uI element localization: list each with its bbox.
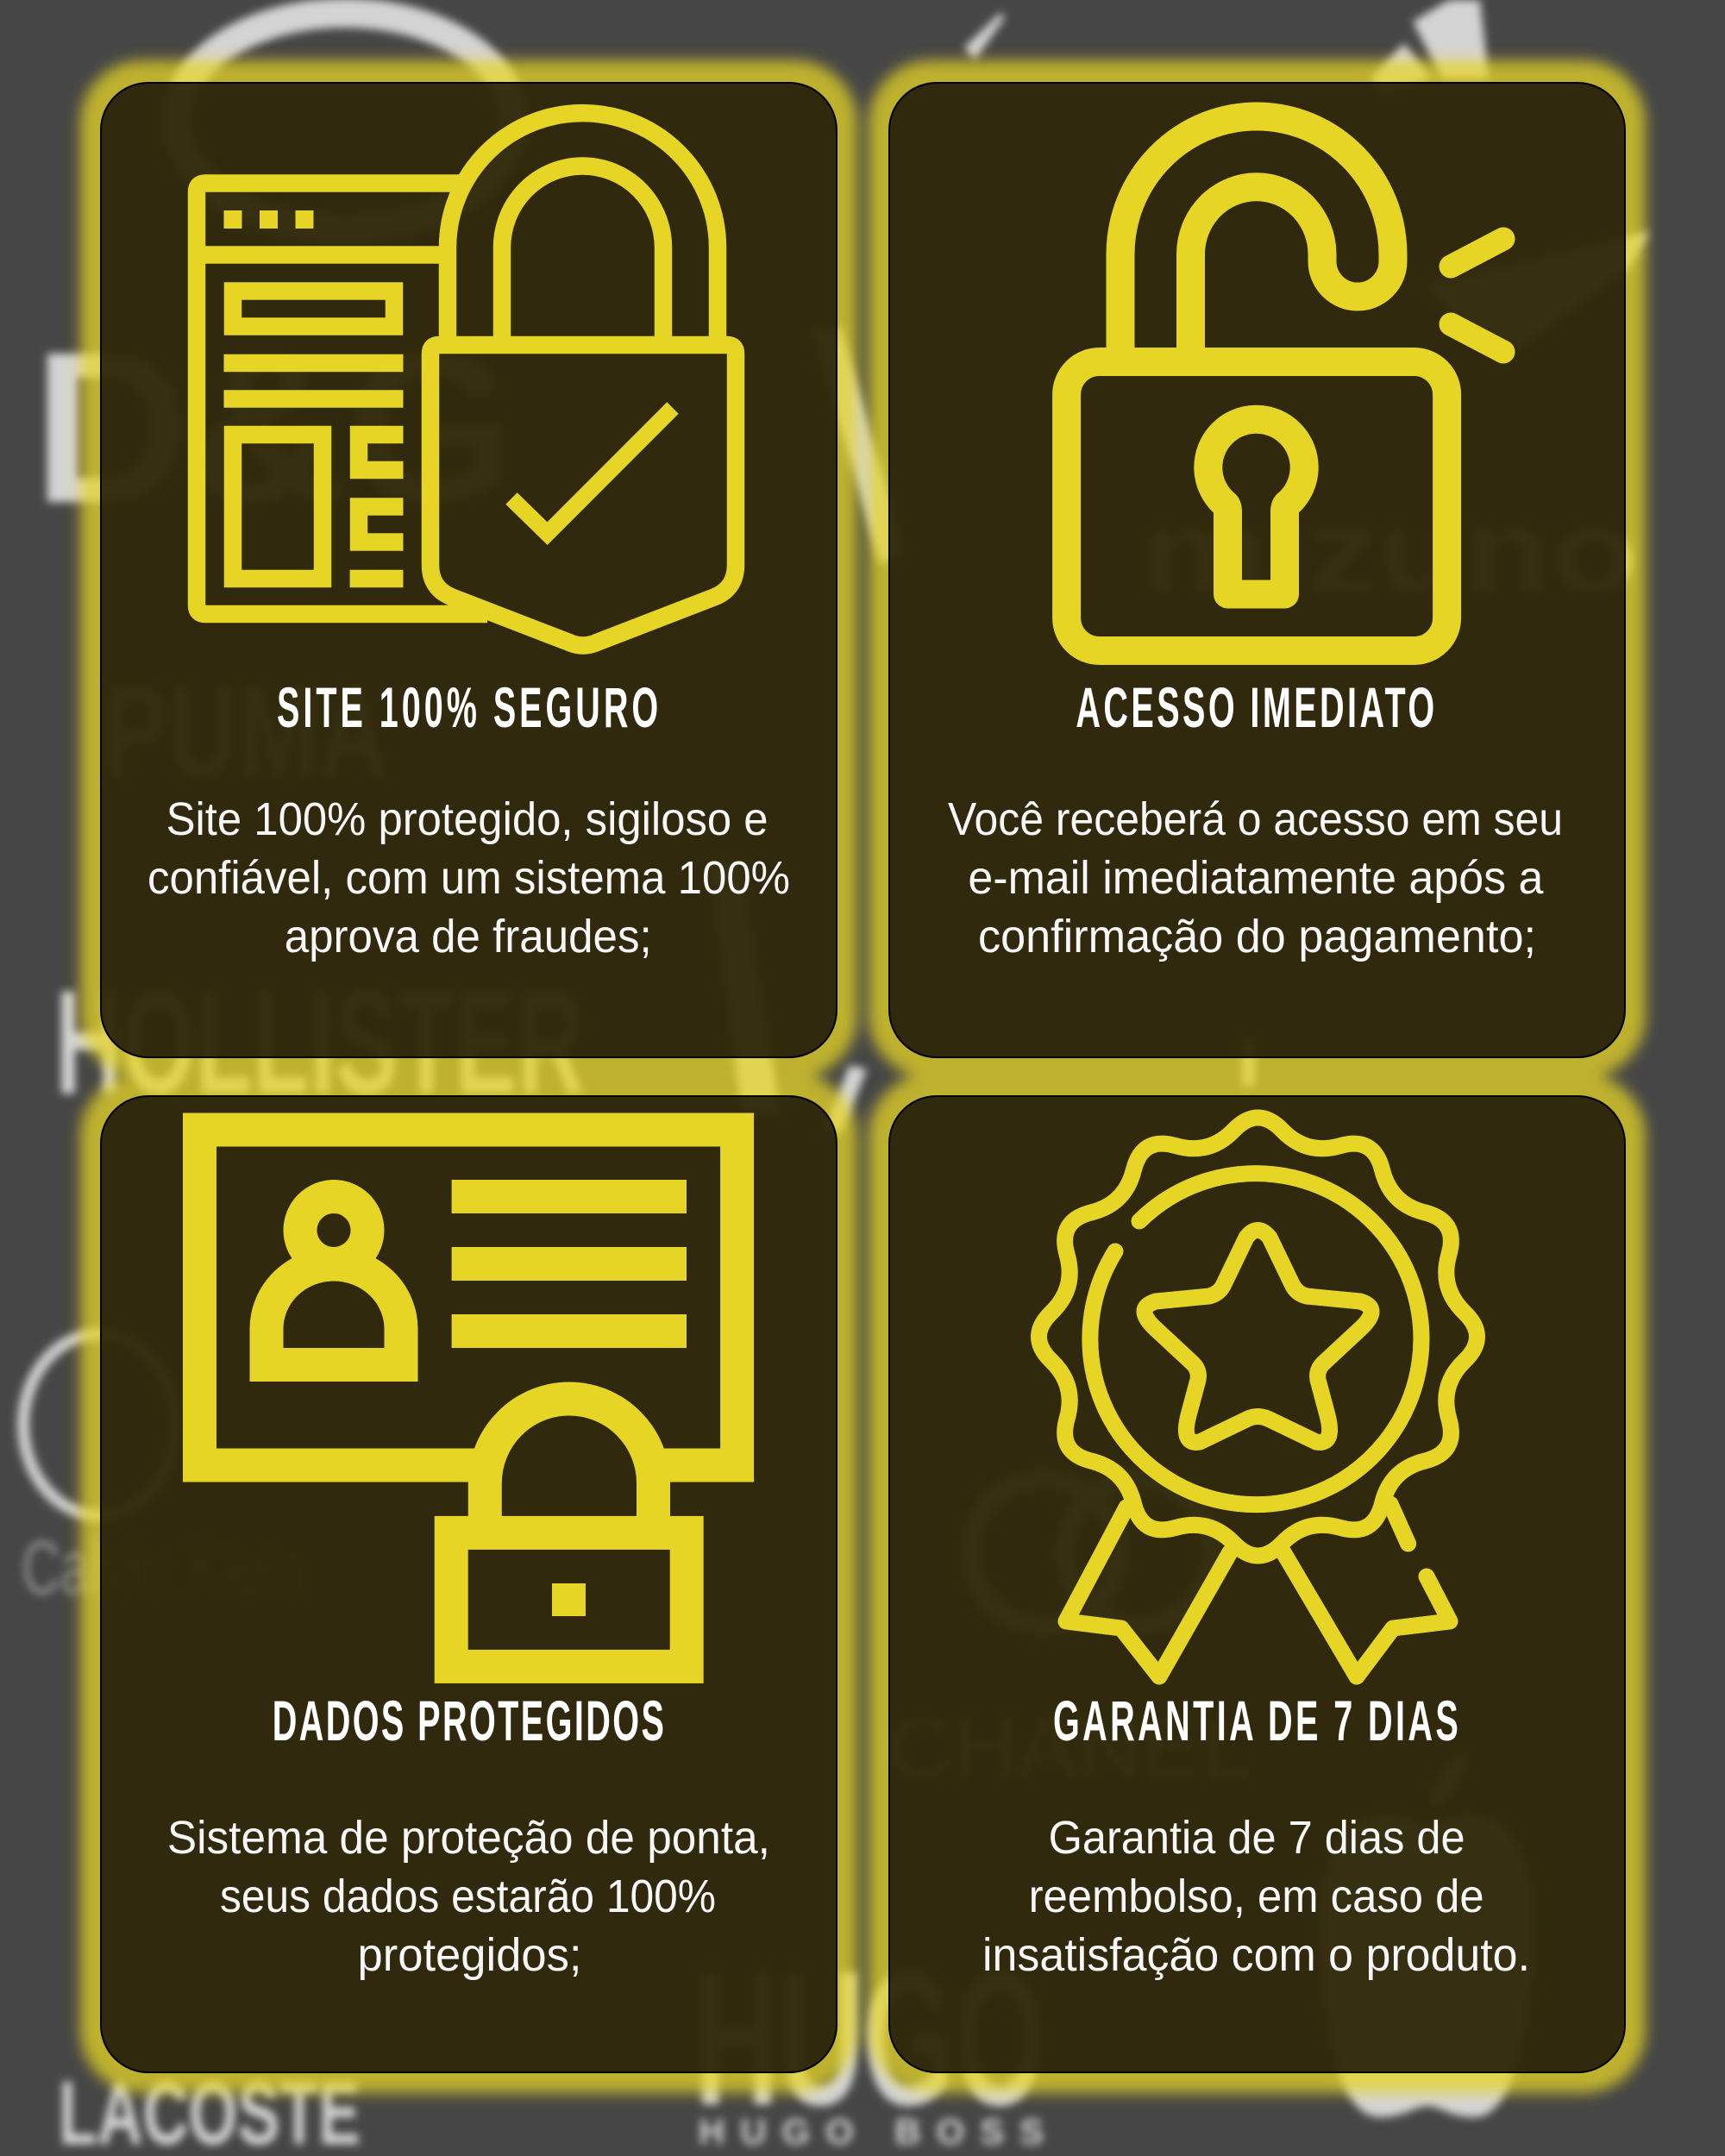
card background — [889, 1096, 1625, 2072]
body text: Você receberá o acesso em seu — [948, 793, 1563, 845]
card background — [101, 1096, 837, 2072]
body text: reembolso, em caso de — [1029, 1871, 1484, 1922]
body text — [982, 1812, 1530, 1981]
body text: insatisfação com o produto. — [982, 1929, 1530, 1981]
icon: browser window with shield padlock — [197, 113, 736, 645]
blurred brand logos background: D&G — [33, 307, 516, 548]
body text: seus dados estarão 100% — [220, 1871, 716, 1922]
panel: garantia — [889, 1096, 1625, 2072]
body text: e-mail imediatamente após a — [968, 852, 1544, 904]
body text: confirmação do pagamento; — [978, 911, 1536, 962]
icon: id card with padlock — [200, 1130, 737, 1666]
panel: acesso imediato — [889, 83, 1625, 1057]
body text: confiável, com um sistema 100% — [147, 852, 790, 904]
icon: open padlock — [1067, 116, 1503, 650]
panel: site seguro — [101, 83, 837, 1057]
panel: dados protegidos — [101, 1096, 837, 2072]
blurred brand logos background: CHANEL — [888, 1700, 1251, 1795]
body text: Garantia de 7 dias de — [1049, 1812, 1465, 1864]
heading: DADOS PROTEGIDOS — [273, 1689, 664, 1753]
body text — [167, 1812, 770, 1981]
body text: protegidos; — [357, 1929, 581, 1981]
blurred brand logos background: Calvin Klein — [22, 1525, 306, 1610]
icon: award rosette with star — [1038, 1118, 1477, 1677]
body text — [147, 793, 790, 962]
heading: ACESSO IMEDIATO — [1076, 676, 1434, 740]
blurred brand logos background: PUMA — [104, 659, 388, 804]
heading: GARANTIA DE 7 DIAS — [1053, 1689, 1458, 1753]
body text: Sistema de proteção de ponta, — [167, 1812, 770, 1864]
blurred brand logos background: HUGO — [694, 1932, 1045, 2146]
body text: aprova de fraudes; — [285, 911, 652, 962]
blurred brand logos background: HUGO BOSS — [699, 2111, 1044, 2152]
card background — [889, 83, 1625, 1057]
body text — [948, 793, 1563, 962]
blurred brand logos background: mizuno — [1142, 486, 1637, 617]
heading: SITE 100% SEGURO — [277, 676, 658, 740]
blurred brand logos background: HOLLISTER — [55, 960, 585, 1125]
body text: Site 100% protegido, sigiloso e — [166, 793, 768, 845]
card background — [101, 83, 837, 1057]
